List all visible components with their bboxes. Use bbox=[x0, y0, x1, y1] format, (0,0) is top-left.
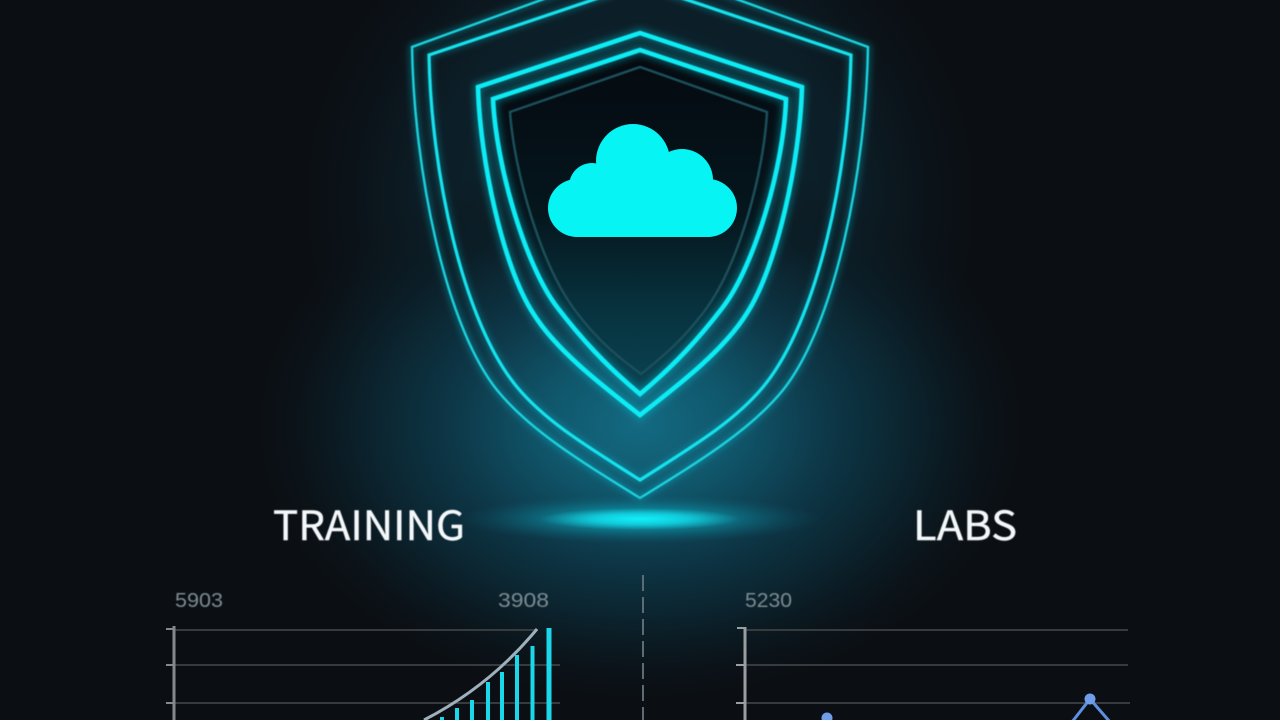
training chart bars bbox=[442, 628, 549, 720]
shield inner fill bbox=[493, 50, 786, 394]
training chart axis bbox=[166, 626, 174, 720]
labs chart label: 5230 bbox=[745, 590, 792, 612]
divider bbox=[642, 575, 644, 720]
shield outer glow bbox=[412, 0, 868, 498]
shield ring 5 dim bbox=[510, 67, 767, 374]
labs chart line series bbox=[822, 694, 1110, 720]
training chart gridlines bbox=[175, 630, 560, 703]
labs chart axis bbox=[736, 627, 745, 720]
heading: training: TRAINING bbox=[273, 494, 465, 552]
training chart label right: 3908 bbox=[498, 590, 549, 612]
shield ring 1 bbox=[412, 0, 868, 498]
shield emblem bbox=[412, 0, 868, 498]
labs chart gridlines bbox=[746, 630, 1130, 703]
glowing platform bbox=[460, 495, 820, 543]
shield ring 4 bbox=[493, 50, 786, 394]
training chart trend line bbox=[424, 629, 537, 720]
shield ring 3 bbox=[478, 33, 802, 415]
shield ring 2 bbox=[429, 0, 851, 480]
chart: training bbox=[166, 590, 560, 720]
heading: labs: LABS bbox=[913, 494, 1017, 552]
training chart label left: 5903 bbox=[175, 590, 223, 612]
chart: labs bbox=[736, 590, 1130, 720]
icon: cloud bbox=[548, 124, 737, 237]
